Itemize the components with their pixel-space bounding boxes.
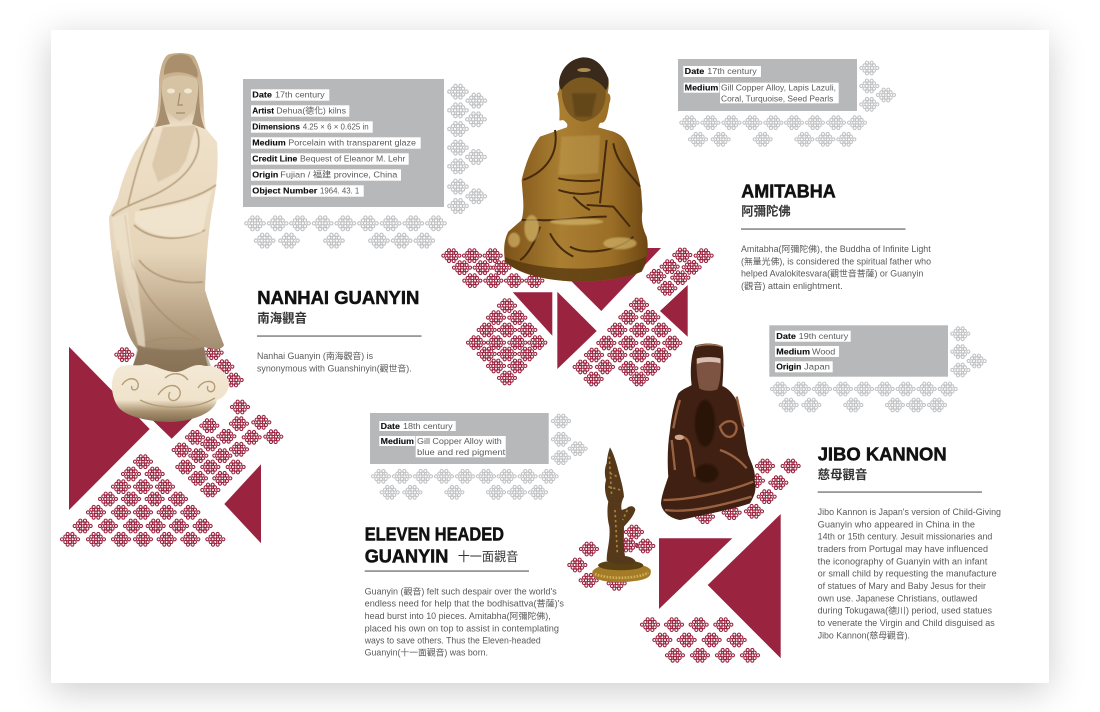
text block: Jibo Kannon description: during Tokugawa(德川) period, used statues [818, 605, 993, 616]
statue: Nanhai Guanyin [109, 53, 229, 422]
grey knots: nanhai box [245, 84, 487, 248]
text block: Jibo Kannon description: traders from Portugal may have influenced [818, 544, 988, 554]
lotus cloud base [112, 364, 229, 422]
heading: Eleven Headed Guanyin: 十一面觀音 [458, 549, 518, 564]
figure [605, 447, 636, 564]
info box: Nanhai Guanyin: Porcelain with transparent glaze [288, 138, 416, 148]
info box: Amitabha: Medium [685, 83, 719, 93]
cloud scrolls [122, 374, 215, 407]
hair [559, 57, 608, 90]
text block: Amitabha description: (觀音) attain enlightment. [741, 280, 843, 291]
info box: Nanhai Guanyin: Dehua(德化) kilns [276, 105, 346, 116]
info box: Amitabha: 17th century [707, 66, 757, 76]
triangle: left large [69, 347, 150, 510]
text block: Nanhai Guanyin description: Nanhai Guanyin (南海觀音) is [257, 350, 374, 361]
triangle: under statue [140, 408, 203, 439]
heading: Jibo Kannon: JIBO KANNON [818, 444, 947, 465]
knot pattern: right of statue base [115, 346, 283, 497]
knot pattern: middle cluster [442, 248, 713, 386]
body [661, 344, 755, 520]
lower robe shadow [130, 345, 214, 378]
info box: Eleven Headed Guanyin: Date [381, 421, 400, 431]
text block: Jibo Kannon description: own use. Japanese Christians, outlawed [818, 593, 977, 603]
triangle: middle top [538, 248, 661, 311]
text block: Amitabha description: Amitabha(阿彌陀佛), the Buddha of Infinite Light [741, 243, 931, 254]
triangle: middle right [660, 285, 688, 337]
knot pattern: lower left triangle [60, 455, 225, 546]
info box: Jibo Kannon: Medium [776, 346, 810, 356]
triangle: lower left [659, 538, 732, 609]
grey knots: eleven headed box [371, 414, 587, 499]
text block: Jibo Kannon description: the iconography of Guanyin with an infant [818, 556, 988, 566]
heading: Eleven Headed Guanyin: ELEVEN HEADED [365, 524, 504, 545]
text block: Nanhai Guanyin description: synonymous with Guanshinyin(觀世音). [257, 363, 412, 374]
robe highlight [135, 190, 212, 237]
base shadow [505, 257, 646, 282]
info box: Jibo Kannon: Date [776, 331, 796, 341]
chest shadow [152, 125, 196, 182]
statue: Amitabha [504, 57, 648, 282]
text block: Eleven Headed Guanyin description [364, 585, 565, 658]
triangle: lower right [708, 514, 781, 658]
body silhouette [504, 57, 648, 282]
info box: Amitabha: Gill Copper Alloy, Lapis Lazuli, [721, 83, 836, 93]
info box: Jibo Kannon: Japan [804, 362, 830, 372]
statue: Jibo Kannon [661, 344, 755, 520]
text block: Jibo Kannon description: Jibo Kannon is Japan's version of Child-Giving [818, 507, 1001, 517]
info box: Jibo Kannon [769, 325, 948, 377]
heading: Nanhai Guanyin [257, 287, 422, 337]
face [162, 76, 198, 121]
face [696, 357, 721, 391]
text block: Jibo Kannon description: or small child by requesting the manufacture [818, 569, 997, 579]
text block: Jibo Kannon description: to venerate the Virgin and Child disguised as [818, 618, 995, 628]
heading: Eleven Headed Guanyin [365, 524, 529, 572]
text block: Jibo Kannon description: Jibo Kannon(慈母觀音). [818, 629, 910, 640]
heading: Nanhai Guanyin: NANHAI GUANYIN [257, 287, 419, 308]
text block: Nanhai Guanyin description [257, 350, 412, 374]
text block: Eleven Headed Guanyin description: endless need for help that the bodhisattva(菩薩)'s [365, 598, 565, 608]
heading: Jibo Kannon [818, 444, 982, 493]
info box: Nanhai Guanyin: Fujian / 福建 province, China [280, 169, 398, 180]
info box: Nanhai Guanyin: Date [252, 90, 272, 100]
text block: Jibo Kannon description: Guanyin who appeared in China in the [818, 519, 975, 529]
info box: Jibo Kannon: 19th century [799, 331, 849, 341]
text block: Eleven Headed Guanyin description: ways to save others. Thus the Eleven-headed [364, 635, 541, 645]
robe folds [112, 128, 216, 345]
highlight spot [675, 435, 684, 440]
info box: Eleven Headed Guanyin [370, 413, 549, 464]
triangle: left small [224, 464, 261, 543]
info box: Nanhai Guanyin: Medium [252, 138, 286, 148]
text block: Jibo Kannon description: of statues of Mary and Baby Jesus for their [818, 581, 986, 591]
knot pattern: behind eleven headed statue [568, 525, 655, 590]
info box: Nanhai Guanyin: 17th century [275, 90, 325, 100]
grey knots: jibo box [770, 327, 986, 412]
heading: Amitabha: AMITABHA [741, 180, 836, 201]
heading: Amitabha: 阿彌陀佛 [741, 204, 791, 218]
knot pattern: behind jibo kannon and bottom [640, 459, 800, 662]
eyes and mouth [167, 88, 192, 94]
text block: Jibo Kannon description [818, 507, 1001, 640]
statue: Eleven Headed Guanyin [592, 447, 651, 582]
robe body [109, 53, 224, 385]
info box: Eleven Headed Guanyin: Gill Copper Alloy with [417, 436, 502, 446]
text block: Amitabha description: helped Avalokitesvara(觀世音菩薩) or Guanyin [741, 268, 923, 279]
arm highlights [508, 215, 637, 249]
text block: Amitabha description [741, 243, 931, 291]
triangle: middle centre [557, 292, 597, 369]
dark folds [520, 130, 640, 260]
info box: Nanhai Guanyin: 4.25 × 6 × 0.625 in [303, 122, 369, 132]
forehead highlight [697, 357, 721, 364]
chest highlight [558, 135, 600, 175]
robe highlights [663, 397, 753, 511]
ushnisha highlight [577, 68, 591, 72]
text block: Eleven Headed Guanyin description: Guanyin(十一面觀音) was born. [365, 647, 488, 658]
text block: Amitabha description: (無量光佛), is considered the spiritual father who [741, 255, 931, 266]
info box: Nanhai Guanyin: Dimensions [252, 122, 300, 132]
heading: Eleven Headed Guanyin: GUANYIN [365, 545, 448, 566]
info box: Jibo Kannon: Wood [812, 346, 836, 356]
info box: Jibo Kannon: Origin [776, 362, 801, 372]
heading: Amitabha [741, 180, 906, 230]
triangle: middle left [513, 292, 552, 336]
crown [164, 54, 198, 78]
text block: Eleven Headed Guanyin description: placed his own on top to assist in contemplating [365, 623, 559, 633]
text block: Eleven Headed Guanyin description: head burst into 10 pieces. Amitabha(阿彌陀佛), [365, 610, 551, 621]
text block: Eleven Headed Guanyin description: Guanyin (觀音) felt such despair over the world's [365, 585, 557, 596]
info box: Nanhai Guanyin: Artist [252, 106, 274, 116]
lotus base [592, 563, 651, 582]
heading: Jibo Kannon: 慈母觀音 [818, 467, 867, 482]
text block: Jibo Kannon description: 14th or 15th century. Jesuit missionaries and [818, 532, 992, 542]
info box: Nanhai Guanyin: Origin [252, 170, 278, 180]
grey knots: amitabha box [680, 61, 896, 146]
info box: Amitabha [678, 59, 857, 111]
info box: Nanhai Guanyin: Bequest of Eleanor M. Lehr [300, 154, 405, 164]
info box: Eleven Headed Guanyin: Medium [381, 436, 414, 446]
info box: Eleven Headed Guanyin: blue and red pigment [417, 447, 506, 457]
info box: Amitabha: Date [685, 66, 705, 76]
info box: Nanhai Guanyin: 1964. 43. 1 [320, 186, 359, 196]
veil shadow [155, 82, 205, 129]
info box: Eleven Headed Guanyin: 18th century [403, 421, 453, 431]
info box: Nanhai Guanyin [243, 79, 444, 207]
face [562, 77, 606, 122]
info box: Nanhai Guanyin: Credit Line [252, 154, 298, 164]
figure highlights [608, 457, 627, 553]
info box: Nanhai Guanyin: Object Number [252, 186, 318, 196]
dark shadow [695, 400, 718, 483]
heading: Nanhai Guanyin: 南海觀音 [257, 310, 307, 326]
info box: Amitabha: Coral, Turquoise, Seed Pearls [721, 93, 833, 103]
crown highlight [696, 345, 722, 347]
